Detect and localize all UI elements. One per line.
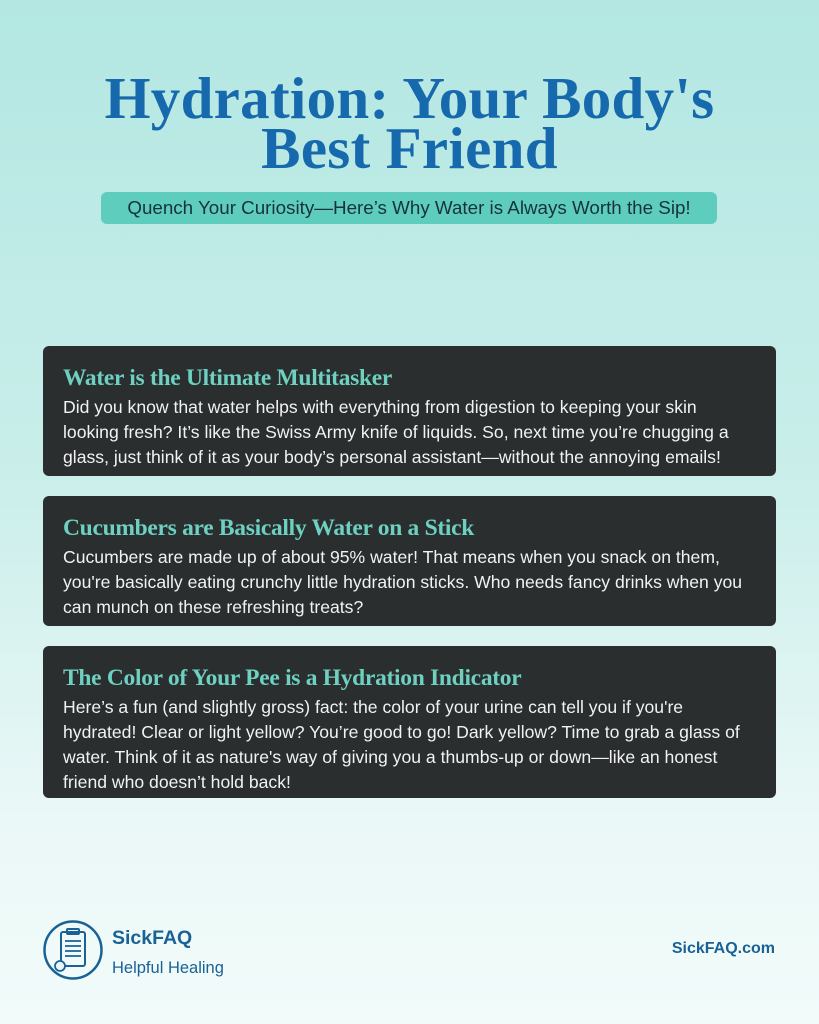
title: Best Friend [261,115,558,181]
subtitle banner: Quench Your Curiosity—Here’s Why Water is Always Worth the Sip! [127,197,691,218]
heading: multitasker: Water is the Ultimate Multitasker [63,365,392,391]
panel: cucumbers [43,496,776,626]
panel: multitasker [43,346,776,476]
text: pee color: hydrated! Clear or light yellow? You’re good to go! Dark yellow? Time to grab a glass of [63,722,740,742]
text: multitasker: Did you know that water helps with everything from digestion to keeping your skin [63,397,697,417]
title [105,65,714,181]
text: cucumbers [63,547,742,617]
text: pee color: Here’s a fun (and slightly gross) fact: the color of your urine can tell you if you're [63,697,683,717]
heading: cucumbers: Cucumbers are Basically Water on a Stick [63,515,474,541]
text: multitasker: looking fresh? It’s like the Swiss Army knife of liquids. So, next time you’re chugging a [63,422,729,442]
text: pee color [63,697,740,792]
brand name [112,927,224,977]
brand name: Helpful Healing [112,959,224,977]
panel: pee color [43,646,776,798]
text: pee color: water. Think of it as nature's way of giving you a thumbs-up or down—like an honest [63,747,717,767]
text: pee color: friend who doesn’t hold back! [63,772,291,792]
title: Hydration: Your Body's [105,65,714,131]
icon: logo clipboard [43,920,103,980]
website url: SickFAQ.com [672,940,775,957]
text: cucumbers: Cucumbers are made up of about 95% water! That means when you snack on them, [63,547,720,567]
text: multitasker [63,397,729,467]
text: cucumbers: you're basically eating crunchy little hydration sticks. Who needs fancy drinks when you [63,572,742,592]
brand name: SickFAQ [112,927,192,949]
text: cucumbers: can munch on these refreshing treats? [63,597,363,617]
subtitle banner [101,192,717,224]
text: multitasker: glass, just think of it as your body’s personal assistant—without the annoying emails! [63,447,721,467]
heading: pee color: The Color of Your Pee is a Hydration Indicator [63,665,521,691]
